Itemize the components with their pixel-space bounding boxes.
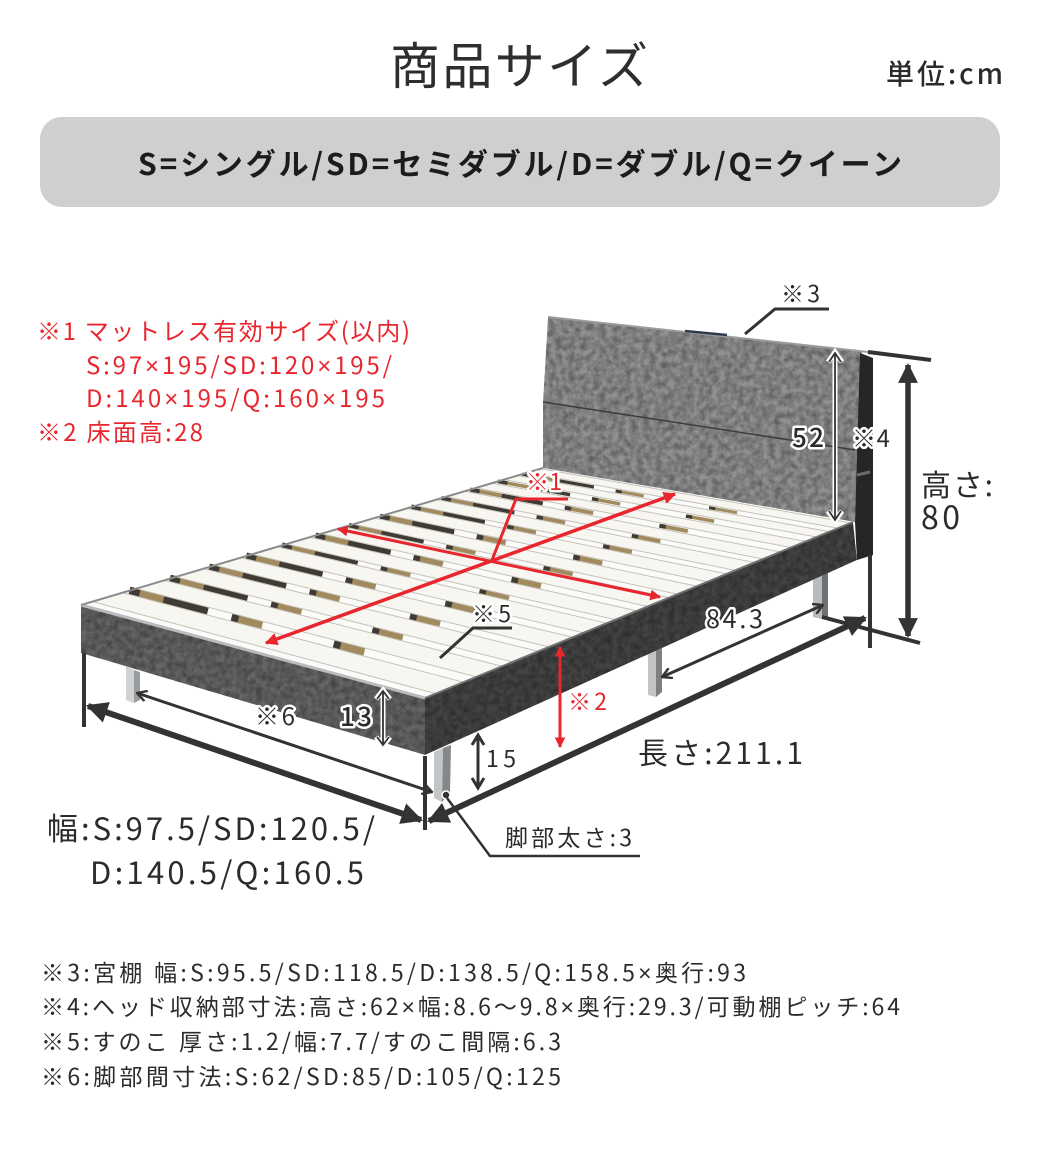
size legend banner — [40, 117, 1000, 207]
red mattress width arrow — [338, 529, 660, 597]
red notes: ※1 マットレス有効サイズ(以内) — [37, 312, 410, 347]
leg thickness label: 脚部太さ:3 — [505, 819, 632, 853]
dimension guide lines — [84, 352, 931, 830]
dimension labels: ※5 — [472, 595, 511, 629]
height label — [921, 461, 993, 539]
width label — [47, 804, 375, 893]
leg height arrow 15 — [472, 735, 484, 788]
length arrow — [429, 618, 865, 821]
height label: 80 — [921, 493, 960, 539]
width arrow — [88, 706, 421, 820]
dimension labels: 15 — [486, 740, 516, 774]
length label: 長さ:211.1 — [638, 729, 803, 773]
width label: 幅:S:97.5/SD:120.5/ — [47, 804, 375, 849]
bed illustration — [81, 317, 873, 802]
width label: D:140.5/Q:160.5 — [90, 848, 364, 893]
rail height arrow 13 — [376, 690, 390, 746]
red notes — [37, 312, 410, 448]
leg span arrow: 84.3 — [662, 605, 823, 677]
title: 商品サイズ — [390, 27, 648, 99]
floor height arrow: note 2 — [558, 647, 562, 747]
red notes: S:97×195/SD:120×195/ — [86, 346, 393, 381]
foot rail — [81, 605, 425, 755]
red notes: D:140×195/Q:160×195 — [86, 379, 385, 414]
red notes: ※2 床面高:28 — [37, 413, 203, 448]
footnotes — [41, 954, 900, 1092]
unit label: 単位:cm — [886, 53, 1003, 93]
dimension labels: 84.3 — [706, 600, 763, 636]
dimension labels: ※3 — [781, 275, 820, 309]
footnotes: ※4:ヘッド収納部寸法:高さ:62×幅:8.6～9.8×奥行:29.3/可動棚ピッチ:64 — [41, 988, 900, 1022]
slatted bed surface — [81, 468, 853, 698]
leader: note 3 — [745, 309, 829, 334]
dimension labels: ※2 — [568, 683, 607, 717]
leader: leg thickness — [442, 791, 640, 856]
footnotes: ※6:脚部間寸法:S:62/SD:85/D:105/Q:125 — [41, 1058, 561, 1092]
dimension labels: ※1 — [526, 463, 562, 497]
dimension labels: 52 — [792, 418, 824, 455]
headboard height arrow 52 — [828, 352, 842, 521]
legs — [126, 570, 828, 802]
height label: 高さ: — [921, 461, 993, 505]
footnotes: ※5:すのこ 厚さ:1.2/幅:7.7/すのこ間隔:6.3 — [41, 1023, 561, 1057]
size legend banner: S=シングル/SD=セミダブル/D=ダブル/Q=クイーン — [138, 140, 902, 184]
red mattress length arrow — [266, 494, 675, 643]
dimension labels: ※4 — [852, 419, 890, 454]
headboard — [543, 317, 873, 560]
height arrow — [905, 365, 911, 636]
dimension labels — [255, 275, 890, 774]
red leader: note 1 — [492, 499, 568, 560]
leg span arrow: note 6 — [137, 693, 432, 792]
footnotes: ※3:宮棚 幅:S:95.5/SD:118.5/D:138.5/Q:158.5×奥行:93 — [41, 954, 746, 988]
side rail — [425, 522, 857, 755]
rail trim — [81, 468, 853, 698]
dimension labels: ※6 — [255, 697, 295, 732]
leader: note 5 — [440, 628, 512, 658]
dimension labels: 13 — [340, 697, 372, 734]
